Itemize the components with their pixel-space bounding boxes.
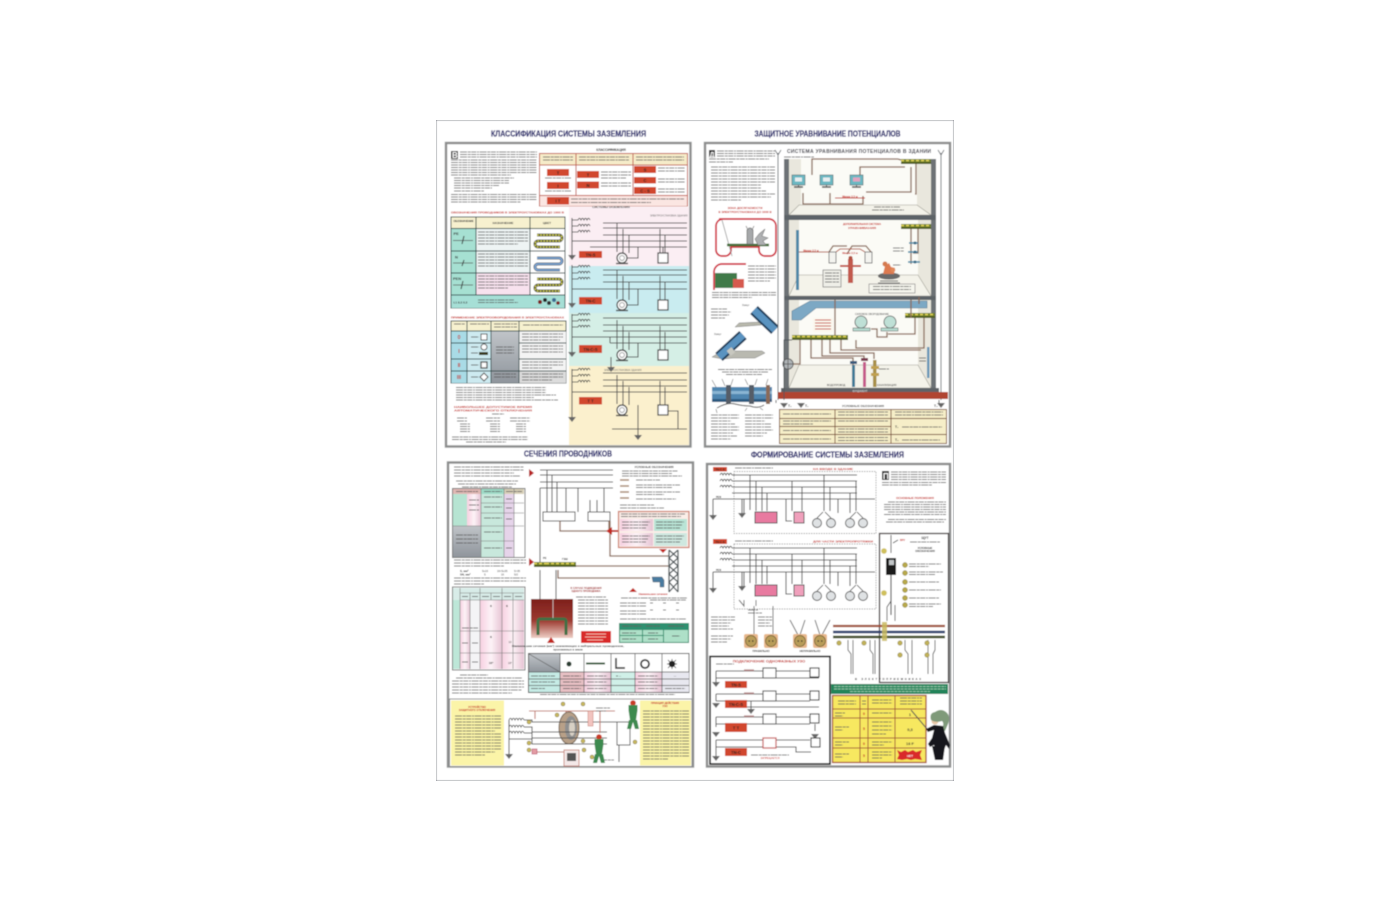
pipe detail one: Хомут (742, 303, 750, 307)
panel board: ЩУТ (921, 536, 929, 540)
red markers (529, 469, 534, 566)
earthing conductor sizes table: — (619, 675, 622, 678)
antennas / earth down conductors (775, 150, 944, 403)
TT diagram: T T (587, 399, 594, 404)
title: classification: КЛАССИФИКАЦИЯ СИСТЕМЫ ЗАЗЕМЛЕНИЯ (491, 128, 646, 138)
poster outer border (436, 120, 954, 781)
conductor designation table (451, 217, 565, 308)
heading: minimum sections of grounding conductors: Наименьшие сечения (мм²) заземляющих и нейтральных проводников, (512, 644, 624, 648)
middle room: reach zones and bath: ДОПОЛНИТЕЛЬНАЯ СИСТЕМА (843, 222, 882, 226)
intro text: Д (710, 152, 714, 159)
classification table: I (557, 183, 559, 188)
conductor designation table: PEN (453, 276, 461, 281)
TN-C-S supply diagram: TN-C-S (715, 468, 725, 472)
explanatory text column (570, 587, 608, 624)
legend table (780, 410, 946, 444)
cross-section table two (452, 587, 525, 670)
TN-C-S diagram: TN-C-S (583, 347, 598, 352)
cross-section table two: 16* (508, 661, 512, 665)
teacher figure (911, 710, 950, 760)
table footnote (540, 694, 675, 696)
formula text block: S, мм² (460, 569, 469, 573)
TT diagram: ЭЛЕКТРОУСТАНОВКА ЗДАНИЯ (604, 369, 642, 372)
earth electrode labels: T₂ (788, 404, 792, 408)
TN-S diagram: СИСТЕМЫ ЗАЗЕМЛЕНИЯ (592, 205, 630, 209)
earthing conductor sizes table: — (674, 675, 677, 678)
middle room: reach zones and bath: УРАВНИВАНИЯ (848, 226, 877, 230)
footnote text (452, 675, 524, 693)
yellow text box right: ПРИНЦИП ДЕЙСТВИЯ (651, 701, 679, 705)
cross-section table one (452, 488, 525, 558)
TN-S diagram: ЭЛЕКТРОУСТАНОВКА ЗДАНИЯ (650, 214, 688, 218)
heading: minimum sections of grounding conductors (512, 644, 624, 652)
pink explanatory box (618, 512, 689, 548)
panel: classification of earthing systems (446, 143, 690, 446)
top room: computers and bonding (792, 159, 931, 210)
panel: RCD connection (710, 656, 830, 764)
heading: conductor designation: ОБОЗНАЧЕНИЯ ПРОВОДНИКОВ В ЭЛЕКТРОУСТАНОВКАХ ДО 1000 В (451, 210, 565, 214)
intro text block: В (452, 151, 458, 160)
formula text block (454, 560, 526, 584)
yellow values table: 16 F (906, 741, 915, 746)
bus bar diagram: В ЭЛЕКТРОПРИЕМНИКАХ (855, 677, 921, 681)
classification table: I T (556, 198, 561, 204)
bus bar diagram (833, 622, 945, 681)
equipment classes table: II (458, 363, 461, 369)
worker touching device (593, 734, 605, 763)
TN-C-S diagram (568, 313, 687, 372)
bottom room: duct, motors, main bus: ВОДОПРОВОД (827, 383, 846, 387)
heading: insulating joints (718, 370, 772, 374)
yellow values table (832, 696, 926, 762)
notes and disconnection time table: АВТОМАТИЧЕСКОГО ОТКЛЮЧЕНИЯ (454, 408, 533, 412)
earth electrode labels (780, 403, 945, 408)
classification table: C - S (640, 188, 650, 193)
yellow values table: 5 (863, 754, 865, 758)
key provisions (884, 496, 946, 522)
formula text block: S≤16 (482, 569, 489, 573)
TN-S diagram (568, 205, 688, 264)
wiring scheme: PE (543, 556, 547, 560)
top room: computers and bonding: Менее 2,5 м (842, 194, 858, 198)
legend table: T₁ (895, 425, 899, 429)
TN-C-S supply diagram (709, 467, 876, 534)
TN-C-S consumer diagram: PEN (716, 569, 721, 572)
equipment classes table: III (457, 375, 462, 381)
RCD TT: T T (733, 725, 740, 730)
classification table: КЛАССИФИКАЦИЯ (596, 148, 626, 152)
heading: building system: СИСТЕМА УРАВНИВАНИЯ ПОТЕНЦИАЛОВ В ЗДАНИИ (787, 149, 931, 155)
TN-S diagram: TN-S (586, 252, 596, 257)
intro text block (451, 151, 537, 202)
formula text block: S (484, 572, 486, 576)
yellow text box right (640, 700, 691, 766)
formula text block: 16 (501, 572, 504, 576)
earth electrode labels: T₁ (805, 404, 809, 408)
TT diagram (568, 368, 687, 440)
classification table: T (557, 170, 560, 175)
sockets: НЕПРАВИЛЬНО (800, 649, 820, 653)
red warning box (581, 631, 611, 643)
cross-section table two: 6 (506, 604, 508, 608)
yellow text box left: УСТРОЙСТВО (468, 705, 486, 709)
panel: RCD connection: ПОДКЛЮЧЕНИЕ ОДНОФАЗНЫХ УЗО (733, 658, 805, 664)
middle room: reach zones and bath (796, 222, 931, 293)
legend of symbols (620, 465, 682, 508)
cross-section table two: 6 (490, 604, 492, 608)
middle room: reach zones and bath: Менее 2,5 м (803, 248, 819, 252)
equipment classes table: 0 (458, 335, 461, 341)
explanatory text column: ОДНОГО ПРОВОДНИКА (571, 590, 601, 593)
equipment classes table: I (458, 349, 460, 355)
minimum section text and values: Наименьшие сечения (639, 592, 668, 596)
red warning triangle (629, 588, 637, 592)
yellow values table: 0 (863, 712, 865, 716)
TN-C-S supply diagram: НА ВВОДЕ В ЗДАНИЕ (813, 467, 853, 471)
formula text block: S/2 (514, 572, 518, 576)
green note strip (831, 684, 948, 694)
earth electrode labels: T₃ (934, 404, 938, 408)
intro text (709, 150, 775, 200)
legend table: T₂ (895, 438, 899, 442)
sockets (711, 600, 830, 653)
formula text block: S>35 (514, 569, 521, 573)
classification table: T (587, 172, 590, 177)
legend of symbols: УСЛОВНЫЕ ОБОЗНАЧЕНИЯ (634, 465, 674, 469)
TN-C-S supply diagram: PEN (716, 496, 721, 499)
title: potential equalisation: ЗАЩИТНОЕ УРАВНИВАНИЕ ПОТЕНЦИАЛОВ (754, 128, 900, 138)
cross-section table two: 16* (489, 661, 494, 665)
horizontal pipe with bonding (712, 379, 772, 413)
heading: equalisation on pipes (712, 292, 776, 298)
middle room: reach zones and bath: Менее 2,5 м (842, 251, 858, 255)
yellow values table: НЕТ (907, 754, 913, 758)
yellow text box left (451, 700, 504, 766)
RCD TN-C-S: TN-C-S (729, 702, 743, 707)
TN-C-S consumer diagram: TN-C-S (715, 540, 725, 544)
heading: hazard zone: В ЭЛЕКТРОУСТАНОВКАХ ДО 1000 В (718, 210, 772, 214)
title: forming the earthing system: ФОРМИРОВАНИЕ СИСТЕМЫ ЗАЗЕМЛЕНИЯ (751, 449, 904, 459)
bottom room: duct, motors, main bus (783, 297, 935, 400)
classification table: C (643, 178, 647, 183)
classification table (540, 148, 688, 206)
panel board: УСЛОВНЫЕ (918, 547, 933, 550)
panel: protective potential equalisation (705, 143, 950, 446)
conductor designation table: N (455, 254, 458, 260)
conductor designation table: L1 /L2 /L3 (454, 300, 468, 304)
heading: hazard zone (718, 206, 772, 214)
section backgrounds (569, 207, 689, 445)
bottom room: duct, motors, main bus: СИЛОВОЕ ОБОРУДОВАНИЕ (855, 313, 889, 316)
TN-C diagram: TN-C (585, 299, 596, 304)
yellow values table: 0,3 (907, 727, 914, 732)
conductor designation table: ЦВЕТ (543, 221, 551, 225)
TN-C-S consumer diagram (709, 539, 876, 609)
RCD TN-C (712, 738, 820, 761)
intro text (882, 471, 946, 485)
RCD TN-C: TN-C (731, 750, 741, 755)
reach zone figure two (714, 264, 776, 290)
panel: forming the earthing system (707, 464, 950, 766)
panel: conductor cross-sections (448, 462, 693, 766)
panel board: ОБОЗНАЧЕНИЯ (915, 550, 935, 553)
heading: minimum sections of grounding conductors: проложенных в земле (553, 648, 583, 652)
panel board: ВРУ (900, 539, 905, 542)
classification table: N (586, 183, 590, 188)
notes and disconnection time table (452, 388, 558, 442)
key provisions: ОСНОВНЫЕ ПОЛОЖЕНИЯ (896, 496, 934, 500)
cross-section table two: 10 (509, 640, 512, 644)
TN-C diagram (568, 265, 687, 310)
wiring scheme (534, 470, 669, 599)
RCD TN-S: TN-S (731, 682, 741, 687)
conductor designation table: PE (454, 231, 459, 236)
notes and disconnection time table: НАИБОЛЬШЕЕ ДОПУСТИМОЕ ВРЕМЯ (454, 405, 533, 409)
intro text (454, 467, 524, 487)
conductor designation table: НАЗНАЧЕНИЕ (493, 221, 513, 225)
pipe fixture (652, 577, 664, 587)
pipe detail two: Хомут (714, 332, 722, 336)
sockets: ПРАВИЛЬНО (752, 649, 770, 653)
formula text block: 16<S≤35 (497, 569, 508, 573)
building cross-section: ФУНДАМЕНТ (853, 390, 868, 393)
worker on top (627, 700, 639, 729)
steel tower (669, 550, 678, 592)
wiring scheme: ГЗШ (562, 557, 568, 561)
yellow text box left: ЗАЩИТНОГО ОТКЛЮЧЕНИЯ (459, 708, 495, 712)
pipe legend text (711, 415, 773, 439)
title: conductor sections: СЕЧЕНИЯ ПРОВОДНИКОВ (524, 448, 612, 458)
minimum section text and values (620, 592, 687, 619)
formula text block: SN, мм² (460, 572, 471, 576)
classification table: S (644, 167, 647, 172)
green table (619, 623, 689, 643)
RCD TN-C: ЗАПРЕЩАЕТСЯ (760, 757, 780, 760)
reach zone figure (716, 219, 776, 256)
yellow values table: 5 (863, 727, 865, 731)
pipe detail two (712, 332, 765, 359)
earth electrode labels: УСЛОВНЫЕ ОБОЗНАЧЕНИЯ (842, 404, 884, 408)
equipment classes table (451, 321, 566, 383)
heading: hazard zone: ЗОНА ДОСЯГАЕМОСТИ (728, 206, 762, 210)
yellow values table: 1 (909, 712, 912, 717)
TN-C-S consumer diagram: ДЛЯ ЧАСТИ ЭЛЕКТРОПРОТЯЖКИ (813, 540, 873, 544)
panel board (880, 534, 948, 682)
explanatory text column: В СЛУЧАЕ ПОДВЕДЕНИЯ (570, 587, 602, 590)
bus to bathroom room figure (531, 599, 573, 643)
yellow values table: 0 (863, 742, 865, 746)
pipe detail one (711, 303, 775, 330)
conductor designation table: ОБОЗНАЧЕНИЕ (453, 219, 474, 223)
strip: RCD device (450, 699, 692, 766)
bottom room: duct, motors, main bus: КАНАЛИЗАЦИЯ (877, 383, 897, 387)
coils and RCD wiring (505, 702, 637, 766)
building cross-section (778, 157, 948, 399)
yellow text box right: УЗО (662, 704, 668, 708)
earthing conductor sizes table (528, 653, 689, 692)
intro text: П (883, 472, 889, 481)
heading: electrical equipment use: ПРИМЕНЕНИЕ ЭЛЕКТРООБОРУДОВАНИЯ В ЭЛЕКТРОУСТАНОВКАХ (451, 316, 565, 320)
cross-section table two: 6 (490, 635, 492, 639)
